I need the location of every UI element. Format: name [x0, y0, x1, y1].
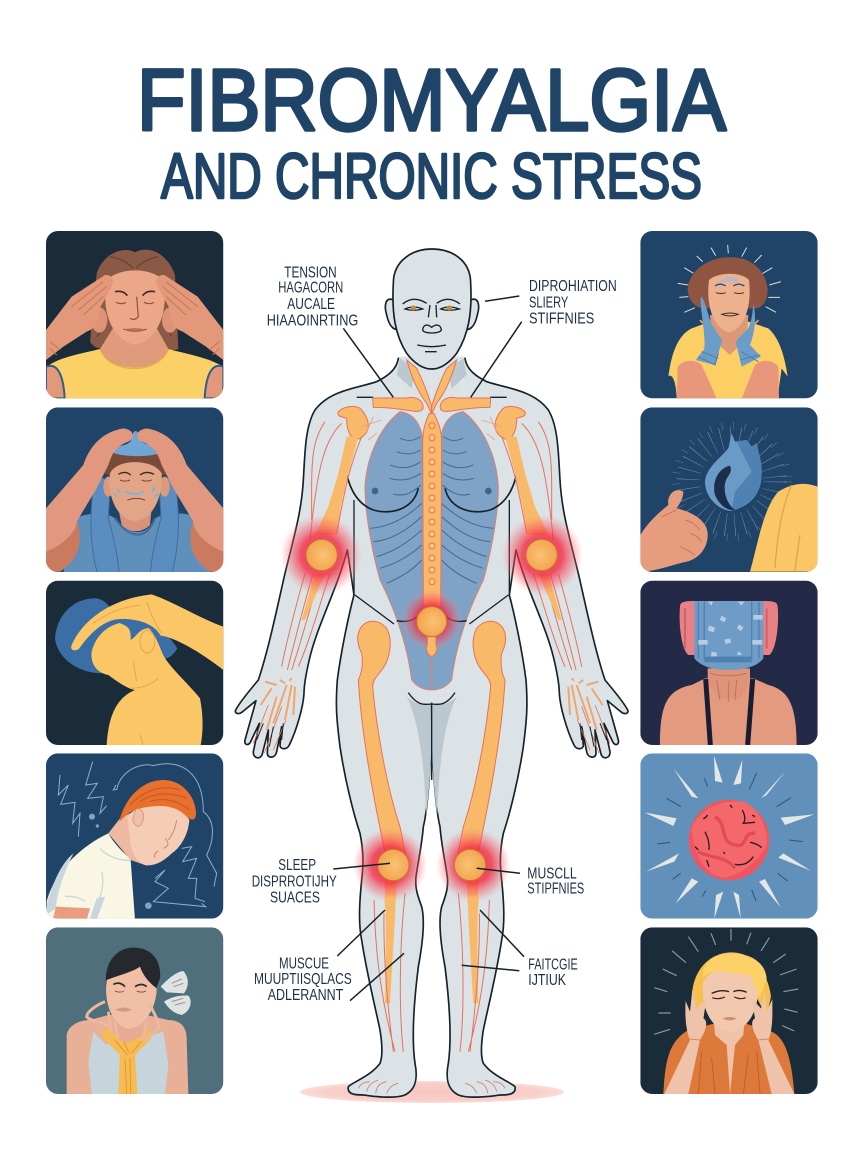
label: upper left: HAGACORN — [278, 280, 343, 297]
leader lines — [333, 296, 524, 1001]
label: knee left: SLEEP — [278, 857, 316, 874]
panel: right 2, fist and burst heart — [640, 407, 818, 572]
label: knee right: MUSCLL — [527, 865, 577, 882]
label: shin left — [254, 955, 352, 1004]
panel: left 3, yellow bowed head — [46, 581, 223, 745]
panel: right 4, red sphere burst — [640, 753, 818, 919]
body figure — [235, 249, 628, 1097]
label: upper left: AUCALE — [287, 296, 335, 313]
label: knee left — [252, 857, 337, 907]
label: shin left: MUSCUE — [279, 955, 329, 972]
label: upper left: HIAAOINRTING — [267, 312, 358, 329]
label: upper left — [267, 264, 358, 329]
lower leg bone and nerves — [384, 873, 397, 1003]
panel: left 5, person with hands at neck — [46, 927, 223, 1094]
panel: left 4, bowed red-haired person with zigzags — [46, 753, 223, 920]
label: upper right — [529, 278, 617, 327]
panel: right 5, blonde person with raised hands — [640, 927, 818, 1094]
spine — [423, 413, 442, 607]
title: FIBROMYALGIA — [137, 52, 726, 149]
label: knee right — [527, 865, 584, 897]
label: shin right: IJTIUK — [528, 972, 566, 989]
panel: left 1, hands on temples — [46, 231, 223, 400]
pelvis and thigh bone — [358, 621, 407, 860]
label: knee left: SUACES — [270, 890, 320, 907]
panel: right 1, hands on cheeks with rays — [640, 231, 818, 398]
label: shin right — [528, 956, 578, 989]
head — [385, 249, 479, 369]
arm bones and nerves — [315, 437, 358, 535]
panel: left 2, towel on head — [46, 407, 223, 573]
floor shadow — [300, 1081, 564, 1103]
shoulder and clavicle — [338, 406, 368, 439]
label: upper left: TENSION — [284, 264, 337, 281]
label: upper right: SLIERY — [529, 295, 569, 312]
label: upper right: DIPROHIATION — [529, 278, 617, 295]
body half outline and anatomy — [235, 357, 432, 1097]
lung panel half — [365, 412, 432, 690]
label: knee left: DISPRROTIJHY — [252, 874, 337, 891]
label: shin left: ADLERANNT — [268, 987, 343, 1004]
title — [137, 52, 726, 212]
label: shin right: FAITCGIE — [528, 956, 578, 973]
label: knee right: STIPFNIES — [527, 880, 584, 897]
label: shin left: MUUPTIISQLACS — [254, 971, 352, 988]
panel: right 3, blue cloth over head — [640, 581, 818, 745]
label: upper right: STIFFNIES — [529, 310, 594, 327]
elbow and knee glows — [280, 514, 362, 596]
hand bones — [261, 678, 295, 730]
groin pain point — [401, 589, 462, 657]
